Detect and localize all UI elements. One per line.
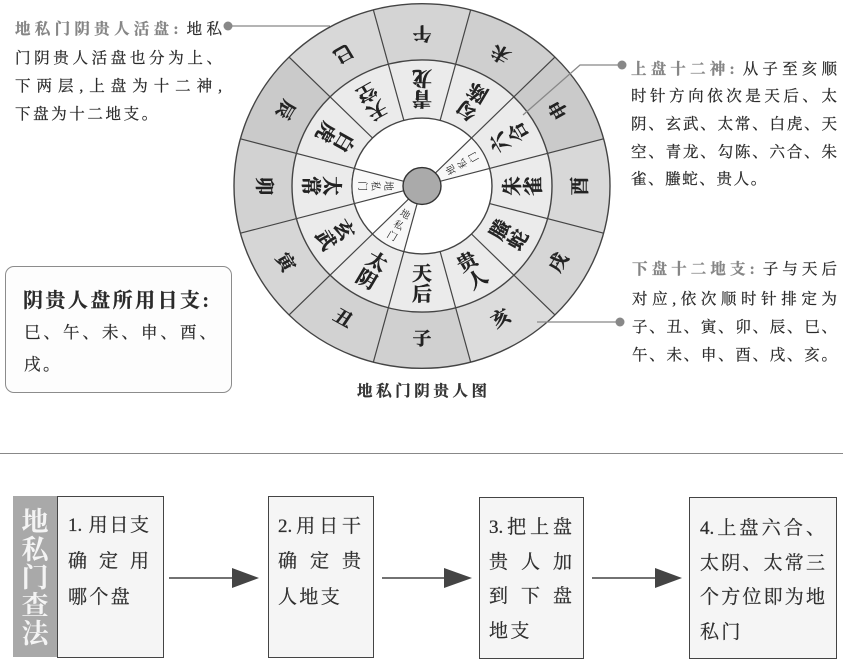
middle ring labels: twelve spirits: 阴 — [352, 266, 380, 294]
step 4 box: 太阴、太常三 — [700, 553, 825, 574]
callout: day branches box: 戌。 — [24, 355, 62, 374]
callout: day branches box — [5, 266, 232, 393]
text block: lower plate description: 午、未、申、酉、戌、亥。 — [632, 347, 837, 364]
text block: lower plate description: 对应,依次顺时针排定为 — [632, 291, 837, 308]
middle ring labels: twelve spirits: 后 — [412, 284, 432, 305]
middle ring labels: twelve spirits: 朱 — [502, 176, 524, 196]
text block: upper plate description: 时针方向依次是天后、太 — [631, 88, 837, 105]
middle ring labels: twelve spirits: 勾 — [453, 95, 482, 124]
middle ring labels: twelve spirits: 贵 — [453, 247, 485, 277]
sidebar heading: 地 — [22, 507, 48, 537]
callout: day branches box: 阴贵人盘所用日支: — [23, 290, 209, 312]
outer ring labels: earthly branches: 戌 — [545, 249, 573, 276]
text block: lower plate description: 下盘十二地支: 子与天后 — [632, 261, 837, 278]
step 3 box: 3.把上盘 — [489, 517, 572, 538]
outer ring labels: earthly branches: 辰 — [271, 96, 299, 123]
leader line: left — [224, 22, 330, 30]
step 3 box — [479, 497, 584, 659]
middle ring labels: twelve spirits: 空 — [352, 78, 381, 107]
sidebar heading: 法 — [22, 619, 48, 649]
middle ring labels: twelve spirits: 合 — [504, 118, 534, 146]
outer ring labels: earthly branches: 亥 — [488, 305, 515, 333]
outer ring labels: earthly branches: 酉 — [570, 177, 591, 195]
middle ring labels: twelve spirits: 天 — [412, 263, 432, 285]
text block: lower plate description — [632, 260, 837, 364]
sidebar heading — [13, 496, 57, 657]
step 4 box: 个方位即为地 — [700, 587, 825, 608]
outer ring sectors — [234, 4, 610, 368]
arrow 1 — [169, 568, 259, 588]
slice labels: 地私门: 私 — [391, 218, 406, 233]
middle ring labels: twelve spirits — [299, 67, 545, 305]
slice labels: 地私门: 门 — [356, 181, 369, 191]
middle ring labels: twelve spirits: 人 — [464, 266, 492, 294]
step 2 box — [268, 496, 374, 658]
outer ring labels: earthly branches: 子 — [412, 329, 432, 350]
outer ring labels: earthly branches: 未 — [487, 39, 515, 66]
arrow 2 — [382, 568, 472, 588]
arrow 3 — [592, 568, 682, 588]
caption: 地私门阴贵人图 — [357, 383, 487, 400]
middle ring labels: twelve spirits: 龙 — [412, 67, 432, 88]
outer ring labels: earthly branches: 寅 — [271, 249, 301, 278]
inner ring slices — [352, 137, 492, 254]
step 2 box: 确定贵 — [278, 551, 361, 572]
outer ring labels: earthly branches: 巳 — [329, 39, 356, 67]
text block: left description: 地私门阴贵人活盘: 地私 — [15, 21, 222, 38]
slice labels: 地私门: 地 — [382, 181, 395, 191]
step 3 box: 地支 — [489, 621, 532, 642]
step 3 box: 贵人加 — [489, 552, 572, 573]
text block: upper plate description: 阴、玄武、太常、白虎、天 — [631, 116, 837, 133]
text block: left description: 下两层,上盘为十二神, — [15, 78, 222, 95]
text block: upper plate description: 雀、螣蛇、贵人。 — [631, 171, 768, 188]
text block: lower plate description: 子、丑、寅、卯、辰、巳、 — [632, 319, 837, 336]
middle ring labels: twelve spirits: 玄 — [329, 216, 359, 245]
wheel — [234, 4, 610, 368]
middle ring labels: twelve spirits: 雀 — [523, 175, 545, 196]
text block: upper plate description: 上盘十二神: 从子至亥顺 — [631, 61, 837, 78]
leader line: lower plate — [537, 318, 624, 326]
middle ring labels: twelve spirits: 天 — [362, 95, 391, 124]
text block: left description: 下盘为十二地支。 — [15, 106, 160, 123]
hub — [403, 168, 441, 204]
leader line: upper plate — [523, 60, 626, 115]
middle ring labels: twelve spirits: 螣 — [486, 215, 516, 244]
step 4 box — [689, 497, 837, 659]
step 1 box: 确定用 — [68, 551, 149, 572]
sidebar heading: 私 — [22, 535, 48, 565]
middle ring labels: twelve spirits: 太 — [362, 248, 391, 277]
chart: wheel diagram with leader lines — [224, 3, 626, 369]
step 1 box: 1. 用日支 — [68, 515, 149, 536]
sidebar heading: 查 — [22, 591, 48, 621]
middle ring labels: twelve spirits: 白 — [329, 128, 358, 156]
outer ring labels: earthly branches: 卯 — [253, 177, 274, 195]
outer ring labels: earthly branches: 午 — [412, 22, 432, 43]
middle ring labels: twelve spirits: 陈 — [462, 77, 492, 106]
step 2 box: 人地支 — [278, 587, 342, 608]
slice labels: 地私门: 地 — [398, 206, 413, 222]
outer ring labels: earthly branches: 丑 — [329, 306, 357, 333]
middle ring labels: twelve spirits: 武 — [310, 226, 340, 254]
slice labels: 地私门: 门 — [465, 150, 482, 165]
step 1 box — [57, 496, 164, 658]
middle ring labels: twelve spirits: 虎 — [310, 118, 340, 146]
middle ring labels: twelve spirits: 蛇 — [504, 226, 534, 254]
slice labels: 地私门: 门 — [385, 228, 400, 244]
step 3 box: 到下盘 — [489, 586, 572, 607]
middle ring labels: twelve spirits: 青 — [412, 87, 432, 109]
text block: upper plate description: 空、青龙、勾陈、六合、朱 — [631, 144, 837, 161]
slice labels: 地私门: 私 — [455, 156, 470, 170]
step 4 box: 4.上盘六合、 — [700, 518, 825, 539]
text block: upper plate description — [631, 60, 837, 188]
step 2 box: 2.用日干 — [278, 516, 361, 537]
outer ring labels: earthly branches — [253, 22, 591, 350]
slice labels: 地私门 — [356, 150, 482, 244]
middle ring labels: twelve spirits: 六 — [485, 126, 515, 156]
outer ring labels: earthly branches: 申 — [545, 96, 573, 122]
middle ring labels: twelve spirits: 常 — [299, 176, 321, 196]
text block: left description — [15, 20, 222, 123]
callout: day branches box: 巳、午、未、申、酉、 — [24, 323, 216, 342]
step 1 box: 哪个盘 — [68, 587, 132, 608]
sidebar heading: 门 — [22, 563, 48, 593]
middle ring labels: twelve spirits: 太 — [320, 176, 342, 196]
step 4 box: 私门 — [700, 622, 743, 643]
text block: left description: 门阴贵人活盘也分为上、 — [15, 50, 222, 67]
slice labels: 地私门: 私 — [369, 181, 381, 191]
slice labels: 地私门: 地 — [443, 162, 459, 177]
